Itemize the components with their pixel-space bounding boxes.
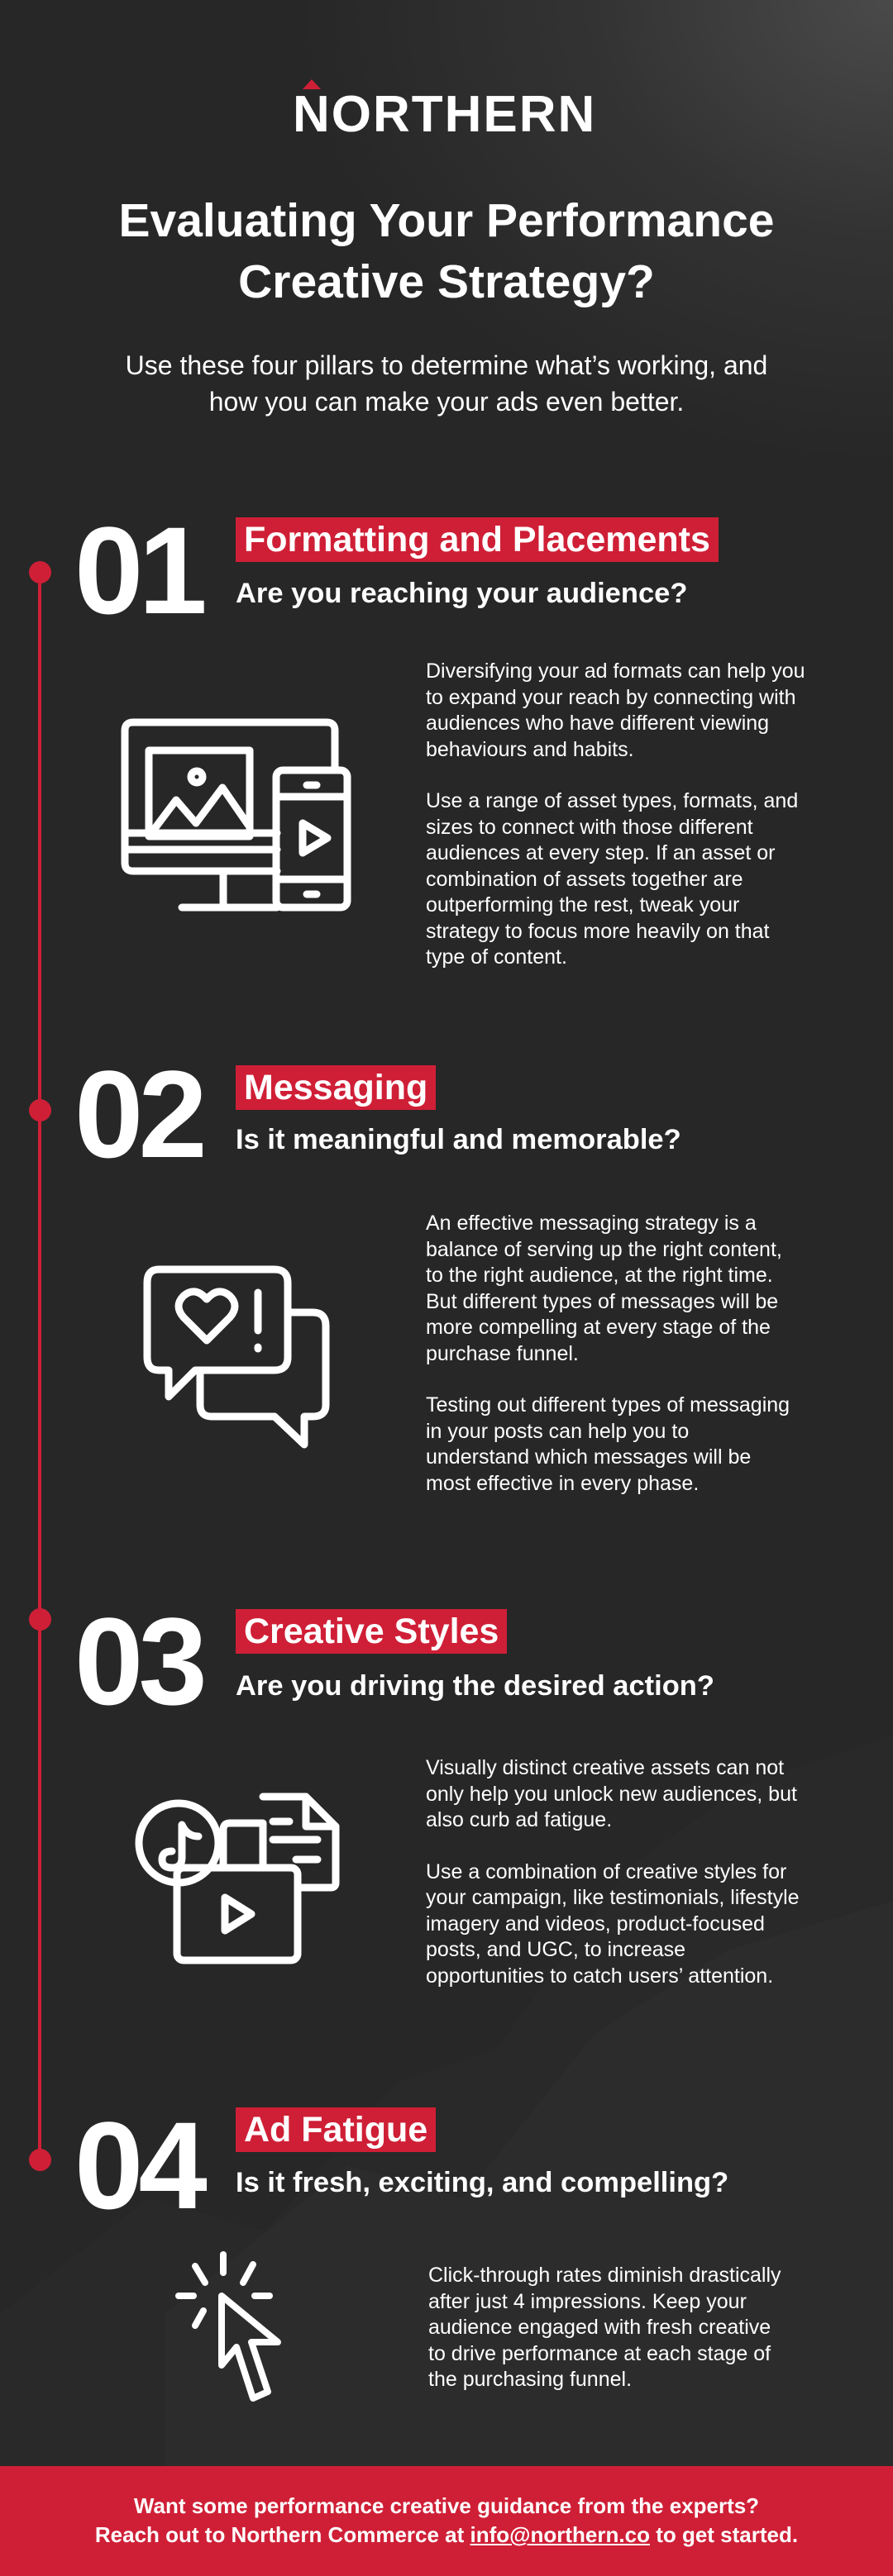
- text 03: also curb ad fatigue.: [426, 1808, 612, 1831]
- logo: NORTHERN: [293, 86, 596, 143]
- text 03: Visually distinct creative assets can not: [426, 1756, 784, 1779]
- label 02: Messaging: [244, 1068, 427, 1107]
- text 01: combination of assets together are: [426, 868, 743, 891]
- footer CTA: [0, 2466, 893, 2576]
- text 02: balance of serving up the right content,: [426, 1238, 782, 1261]
- text 03: imagery and videos, product-focused: [426, 1912, 765, 1936]
- text 01: type of content.: [426, 945, 567, 969]
- footer CTA: Reach out to Northern Commerce at info@northern.co to get started.: [95, 2522, 798, 2547]
- text 01: sizes to connect with those different: [426, 815, 753, 838]
- text 01: [426, 659, 805, 969]
- subtitle: Use these four pillars to determine what’s working, and: [126, 350, 767, 380]
- text 04: Click-through rates diminish drastically: [428, 2264, 781, 2287]
- text 03: posts, and UGC, to increase: [426, 1938, 685, 1961]
- number 02: 02: [74, 1045, 203, 1183]
- dot 01: [29, 561, 51, 583]
- text 04: [428, 2264, 781, 2391]
- subtitle: [126, 350, 767, 417]
- title: Creative Strategy?: [238, 255, 655, 308]
- subtitle 01: Are you reaching your audience?: [236, 578, 687, 609]
- subtitle: how you can make your ads even better.: [209, 387, 684, 417]
- text 02: [426, 1212, 790, 1494]
- text 01: to expand your reach by connecting with: [426, 686, 795, 709]
- text 03: [426, 1756, 800, 1987]
- text 02: in your posts can help you to: [426, 1420, 689, 1443]
- text 02: But different types of messages will be: [426, 1289, 778, 1312]
- number 01: 01: [74, 501, 203, 640]
- icon: cursor click: [175, 2251, 281, 2402]
- number 03: 03: [74, 1592, 203, 1731]
- dot 04: [29, 2149, 51, 2171]
- label 03: Creative Styles: [244, 1612, 499, 1651]
- text 01: Use a range of asset types, formats, and: [426, 789, 798, 812]
- text 02: understand which messages will be: [426, 1445, 751, 1469]
- text 01: strategy to focus more heavily on that: [426, 919, 769, 942]
- subtitle 04: Is it fresh, exciting, and compelling?: [236, 2167, 728, 2198]
- text 04: to drive performance at each stage of: [428, 2342, 771, 2365]
- dot 03: [29, 1608, 51, 1631]
- text 04: audience engaged with fresh creative: [428, 2316, 771, 2339]
- text 02: An effective messaging strategy is a: [426, 1212, 757, 1235]
- text 02: purchase funnel.: [426, 1342, 579, 1365]
- text 04: after just 4 impressions. Keep your: [428, 2289, 747, 2312]
- icon: chat bubbles: [144, 1266, 329, 1448]
- text 02: more compelling at every stage of the: [426, 1316, 771, 1339]
- label 01: Formatting and Placements: [244, 520, 710, 559]
- icon: tiktok, document, video: [136, 1793, 339, 1964]
- text 03: Use a combination of creative styles for: [426, 1859, 786, 1883]
- text 01: behaviours and habits.: [426, 737, 634, 760]
- subtitle 03: Are you driving the desired action?: [236, 1670, 714, 1702]
- title: Evaluating Your Performance: [119, 194, 774, 247]
- text 02: most effective in every phase.: [426, 1471, 699, 1494]
- timeline line: [38, 570, 41, 2157]
- icon: desktop and phone: [121, 719, 351, 911]
- text 01: audiences who have different viewing: [426, 712, 769, 735]
- subtitle 02: Is it meaningful and memorable?: [236, 1124, 681, 1155]
- number 04: 04: [74, 2096, 203, 2235]
- footer CTA: Want some performance creative guidance from the experts?: [134, 2493, 759, 2518]
- text 03: your campaign, like testimonials, lifestyle: [426, 1886, 800, 1909]
- text 03: opportunities to catch users’ attention.: [426, 1964, 773, 1987]
- text 02: Testing out different types of messaging: [426, 1393, 790, 1417]
- text 01: audiences at every step. If an asset or: [426, 841, 775, 864]
- text 04: the purchasing funnel.: [428, 2368, 632, 2391]
- text 03: only help you unlock new audiences, but: [426, 1782, 797, 1805]
- label 04: Ad Fatigue: [244, 2110, 427, 2150]
- title: [119, 194, 774, 308]
- background mountain texture: [0, 1736, 893, 2471]
- dot 02: [29, 1099, 51, 1121]
- text 01: Diversifying your ad formats can help you: [426, 659, 805, 683]
- text 01: outperforming the rest, tweak your: [426, 893, 739, 917]
- text 02: to the right audience, at the right time.: [426, 1264, 773, 1287]
